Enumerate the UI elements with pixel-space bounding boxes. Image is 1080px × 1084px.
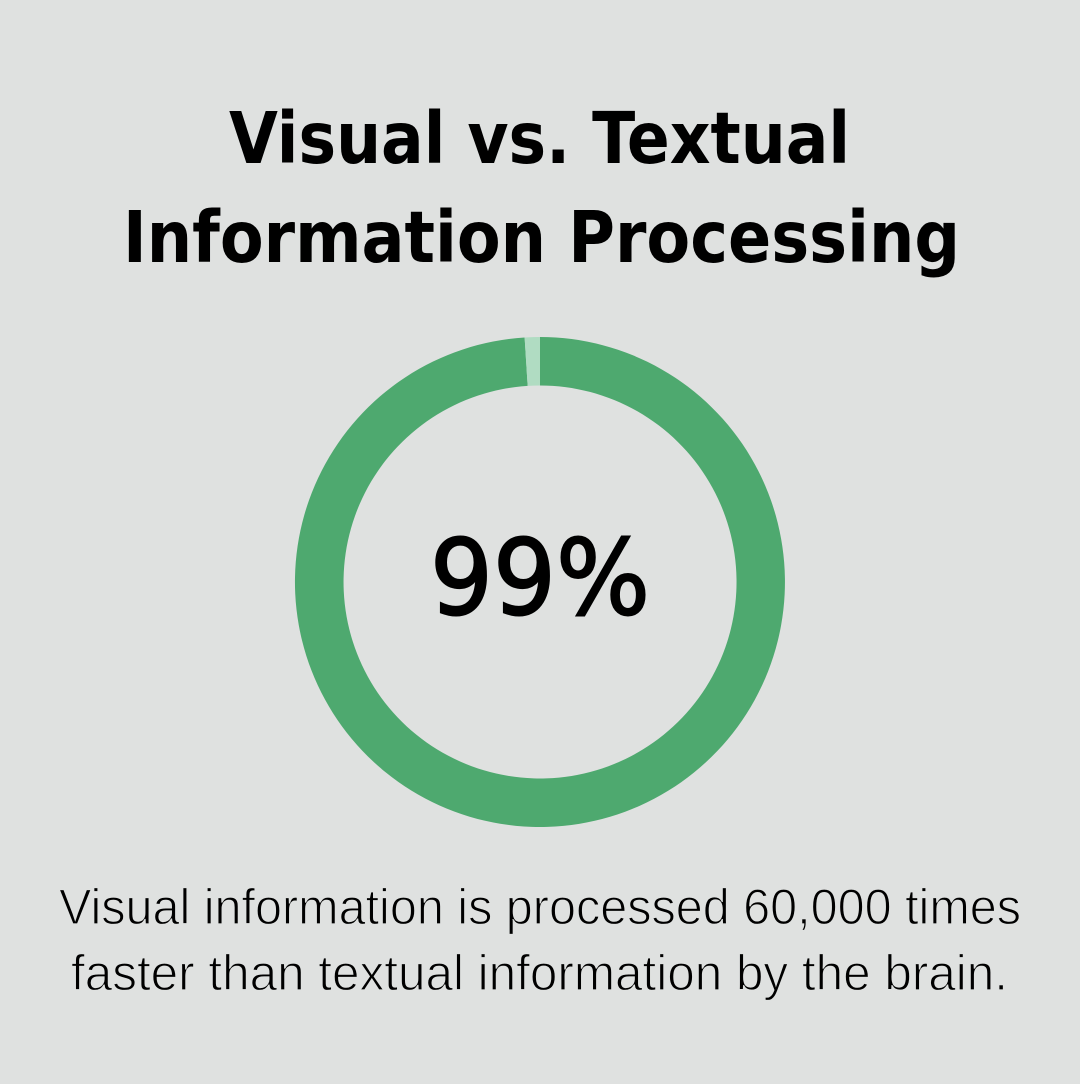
description: faster than textual information by the brain. xyxy=(71,945,1008,1001)
title xyxy=(123,97,960,279)
segment: remaining 1% xyxy=(525,337,540,386)
segment: 99% visual xyxy=(295,337,785,827)
description: Visual information is processed 60,000 times xyxy=(59,879,1021,935)
donut chart xyxy=(295,337,785,827)
description xyxy=(59,879,1021,1001)
center value: 99% xyxy=(430,517,650,639)
title: Visual vs. Textual xyxy=(229,97,850,180)
title: Information Processing xyxy=(123,196,960,279)
